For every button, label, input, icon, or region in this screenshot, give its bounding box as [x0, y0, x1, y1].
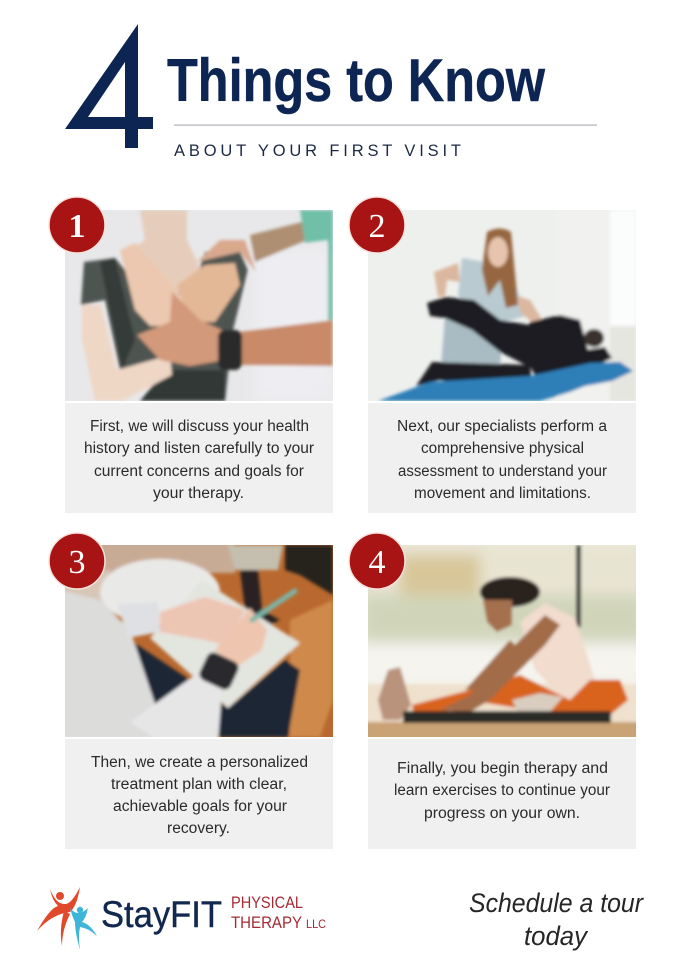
- text card: [65, 739, 333, 849]
- description: [394, 760, 610, 822]
- description: Finally, you begin therapy and: [397, 760, 608, 777]
- description: treatment plan with clear,: [111, 776, 287, 793]
- description: history and listen carefully to your: [84, 440, 314, 457]
- tagline: PHYSICAL: [231, 894, 303, 912]
- description: [91, 754, 308, 837]
- description: First, we will discuss your health: [90, 418, 309, 435]
- description: Next, our specialists perform a: [397, 418, 607, 435]
- number badge 2: [349, 197, 405, 253]
- text card: [368, 739, 636, 849]
- call to action: [469, 888, 644, 951]
- description: recovery.: [167, 820, 230, 837]
- icon: two figures: [37, 887, 97, 950]
- large numeral 4: [65, 24, 153, 148]
- title: Things to Know: [167, 47, 545, 114]
- panel: step 1: [49, 197, 333, 513]
- logo: StayFIT Physical Therapy LLC: [37, 887, 326, 950]
- description: assessment to understand your: [398, 463, 607, 480]
- photo: writing a treatment plan in a notebook: [60, 540, 333, 742]
- call to action: Schedule a tour: [469, 888, 644, 918]
- wordmark: StayFIT: [101, 894, 222, 935]
- number badge 4: [349, 533, 405, 589]
- number badge 1: [49, 197, 105, 253]
- description: learn exercises to continue your: [394, 782, 610, 799]
- tagline: LLC: [306, 917, 326, 931]
- text card: [368, 403, 636, 513]
- panel: step 3: [49, 533, 333, 849]
- description: progress on your own.: [424, 805, 580, 822]
- description: [397, 418, 607, 502]
- photo: woman stretching on a mat: [368, 545, 636, 737]
- description: achievable goals for your: [113, 798, 287, 815]
- description: comprehensive physical: [421, 440, 584, 457]
- call to action: today: [524, 921, 588, 951]
- description: Then, we create a personalized: [91, 754, 308, 771]
- description: movement and limitations.: [414, 485, 591, 502]
- tagline: THERAPY: [231, 914, 302, 932]
- number badge 1: 1: [68, 208, 86, 245]
- number badge 3: 3: [68, 544, 86, 581]
- number badge 4: 4: [368, 544, 386, 581]
- description: [84, 418, 314, 502]
- number badge 2: 2: [368, 208, 386, 245]
- photo: therapist holding patient's arm: [65, 210, 333, 401]
- text card: [65, 403, 333, 513]
- panel: step 4: [349, 533, 650, 849]
- panel: step 2: [349, 197, 636, 513]
- header: [65, 24, 545, 160]
- photo: specialist assessing patient on table: [368, 210, 636, 401]
- tagline: [231, 894, 326, 932]
- subtitle: ABOUT YOUR FIRST VISIT: [174, 142, 461, 160]
- description: current concerns and goals for: [94, 463, 304, 480]
- description: your therapy.: [153, 485, 244, 502]
- number badge 3: [49, 533, 105, 589]
